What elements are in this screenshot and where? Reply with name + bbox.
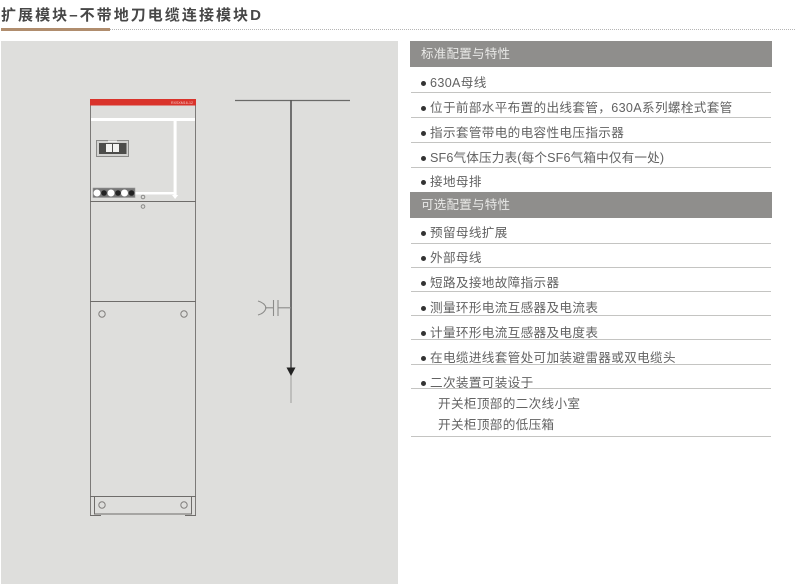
item: secondary device: 二次装置可装设于 [430,376,534,390]
item: busbar: 630A母线 [430,76,487,90]
arrow [286,368,296,376]
switchgear cabinet [90,99,196,516]
heading: standard: 标准配置与特性 [421,47,510,61]
white mimic bus lines [91,118,195,199]
item: metering CT: 计量环形电流互感器及电度表 [430,326,598,340]
button row [93,188,135,198]
panel: cabinet drawing [1,41,398,584]
red header strip [90,99,196,106]
single line diagram [235,100,350,403]
compartment dividers [90,202,196,516]
item: SF6 gauge: SF6气体压力表(每个SF6气箱中仅有一处) [430,151,664,165]
item: measuring CT: 测量环形电流互感器及电流表 [430,301,598,315]
item: external busbar: 外部母线 [430,251,482,265]
dotted rule [110,29,795,30]
heading: optional [410,192,772,218]
panel screws [99,311,187,508]
capacitor symbol [258,300,291,316]
indicator [96,140,128,156]
item: fault indicator: 短路及接地故障指示器 [430,276,559,290]
small knobs [141,195,145,208]
model label: RXSXM16-12 [171,101,193,105]
item: reserved busbar: 预留母线扩展 [430,226,508,240]
heading: optional: 可选配置与特性 [421,198,510,212]
sub item: low voltage box: 开关柜顶部的低压箱 [438,418,554,432]
title underline [1,28,110,30]
sub item: wiring room: 开关柜顶部的二次线小室 [438,397,580,411]
item: voltage indicator: 指示套管带电的电容性电压指示器 [430,126,624,140]
item: bushing: 位于前部水平布置的出线套管，630A系列螺栓式套管 [430,101,733,115]
heading: standard [410,41,772,67]
title: 扩展模块–不带地刀电缆连接模块D [1,7,263,24]
item: earth bar: 接地母排 [430,175,482,189]
item: surge arrester: 在电缆进线套管处可加装避雷器或双电缆头 [430,351,676,365]
